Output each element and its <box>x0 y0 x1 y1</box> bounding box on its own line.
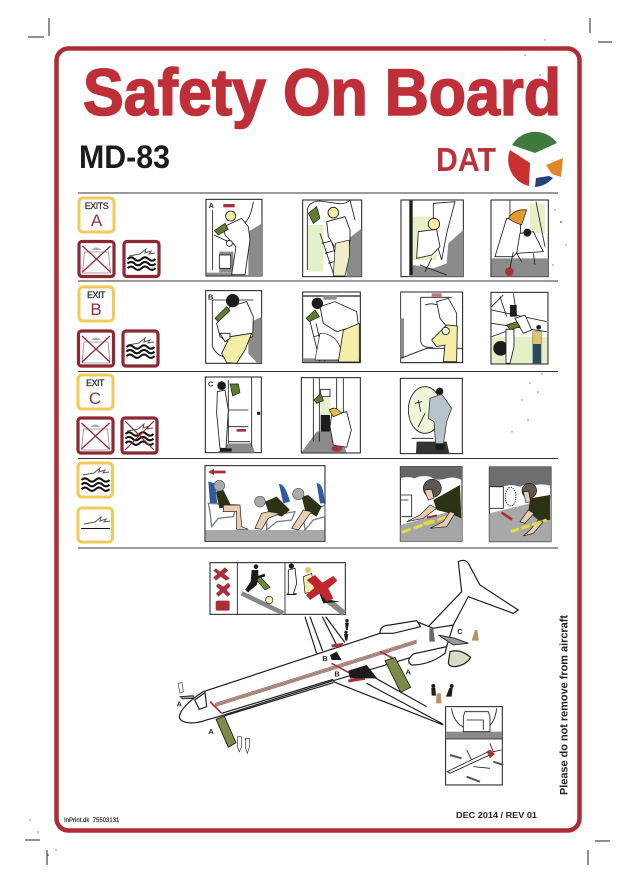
panel: exit A step 3 <box>401 200 463 277</box>
panel: exit C step 3 <box>400 378 462 454</box>
side note: Please do not remove from aircraft <box>558 615 570 795</box>
exit letters: A <box>177 700 183 709</box>
icon: exits A: EXITS <box>85 201 109 211</box>
title: Safety On Board <box>83 55 561 129</box>
icon: over water <box>78 463 112 497</box>
brace and floor lighting row <box>78 463 551 542</box>
panel: exit B step 4 <box>491 292 548 364</box>
panel: exit C step 2 <box>301 378 360 453</box>
panel: no baggage <box>210 563 345 614</box>
evacuating passengers <box>330 619 454 697</box>
aircraft outline <box>179 560 518 725</box>
section divider lines <box>78 193 558 548</box>
icon: exit C: C <box>89 389 101 408</box>
icon: on land <box>78 508 112 542</box>
exit letters: B <box>322 654 328 663</box>
panel: exit B step 2 <box>303 292 360 363</box>
panel: exit A step 4 <box>491 200 548 277</box>
icon: exit C: EXIT <box>86 378 105 388</box>
exit letters <box>177 627 463 736</box>
exit letters: B <box>334 670 340 679</box>
panel: exit B step 3 <box>401 292 463 363</box>
panel: exit B step 1: B <box>208 293 213 302</box>
exit letters: A <box>208 727 214 736</box>
exit letters: C <box>457 627 463 636</box>
panel: exit B step 1 <box>206 291 262 363</box>
printer code: InPrint.dk 75503131 <box>64 818 120 824</box>
icon: exit C <box>78 375 113 409</box>
exits A row <box>79 198 548 277</box>
panel: exit A step 1 <box>206 199 262 276</box>
panel: floor path lighting <box>400 467 462 541</box>
icon: no slide on land <box>78 418 113 453</box>
icon: ditching exit <box>124 242 159 276</box>
exit C row <box>78 375 462 454</box>
icon: no slide on land <box>79 242 114 276</box>
icon: no slide on land <box>78 331 114 366</box>
icon: exit B: EXIT <box>87 290 106 300</box>
icon: exit B <box>79 287 114 321</box>
panel: exit C step 1: C <box>208 380 214 389</box>
evacuation slides <box>180 635 468 747</box>
icon: exits A: A <box>91 211 103 230</box>
icon: ditching exit <box>123 331 158 366</box>
panel: brace position <box>205 466 325 541</box>
panel: exit sign and floor path <box>489 467 551 542</box>
outer red border <box>56 48 580 830</box>
evacuation diagram <box>177 560 518 785</box>
aircraft type heading: MD-83 <box>79 139 170 175</box>
icon: airline logo <box>508 132 563 187</box>
exit B row <box>78 287 548 366</box>
airline name: DAT <box>436 141 496 178</box>
revision date: DEC 2014 / REV 01 <box>456 811 538 820</box>
icon: no ditching exit <box>122 418 157 453</box>
icon: exits A <box>79 198 114 232</box>
panel: exit A step 1: A <box>209 201 215 210</box>
exit letters: A <box>406 668 412 677</box>
panel: exit C step 1 <box>205 377 261 453</box>
panel: exit A step 2 <box>303 200 362 277</box>
exit paths and cabin aisle <box>210 640 417 713</box>
icon: exit B: B <box>90 300 102 319</box>
panel: engine and fire inset <box>446 707 503 785</box>
